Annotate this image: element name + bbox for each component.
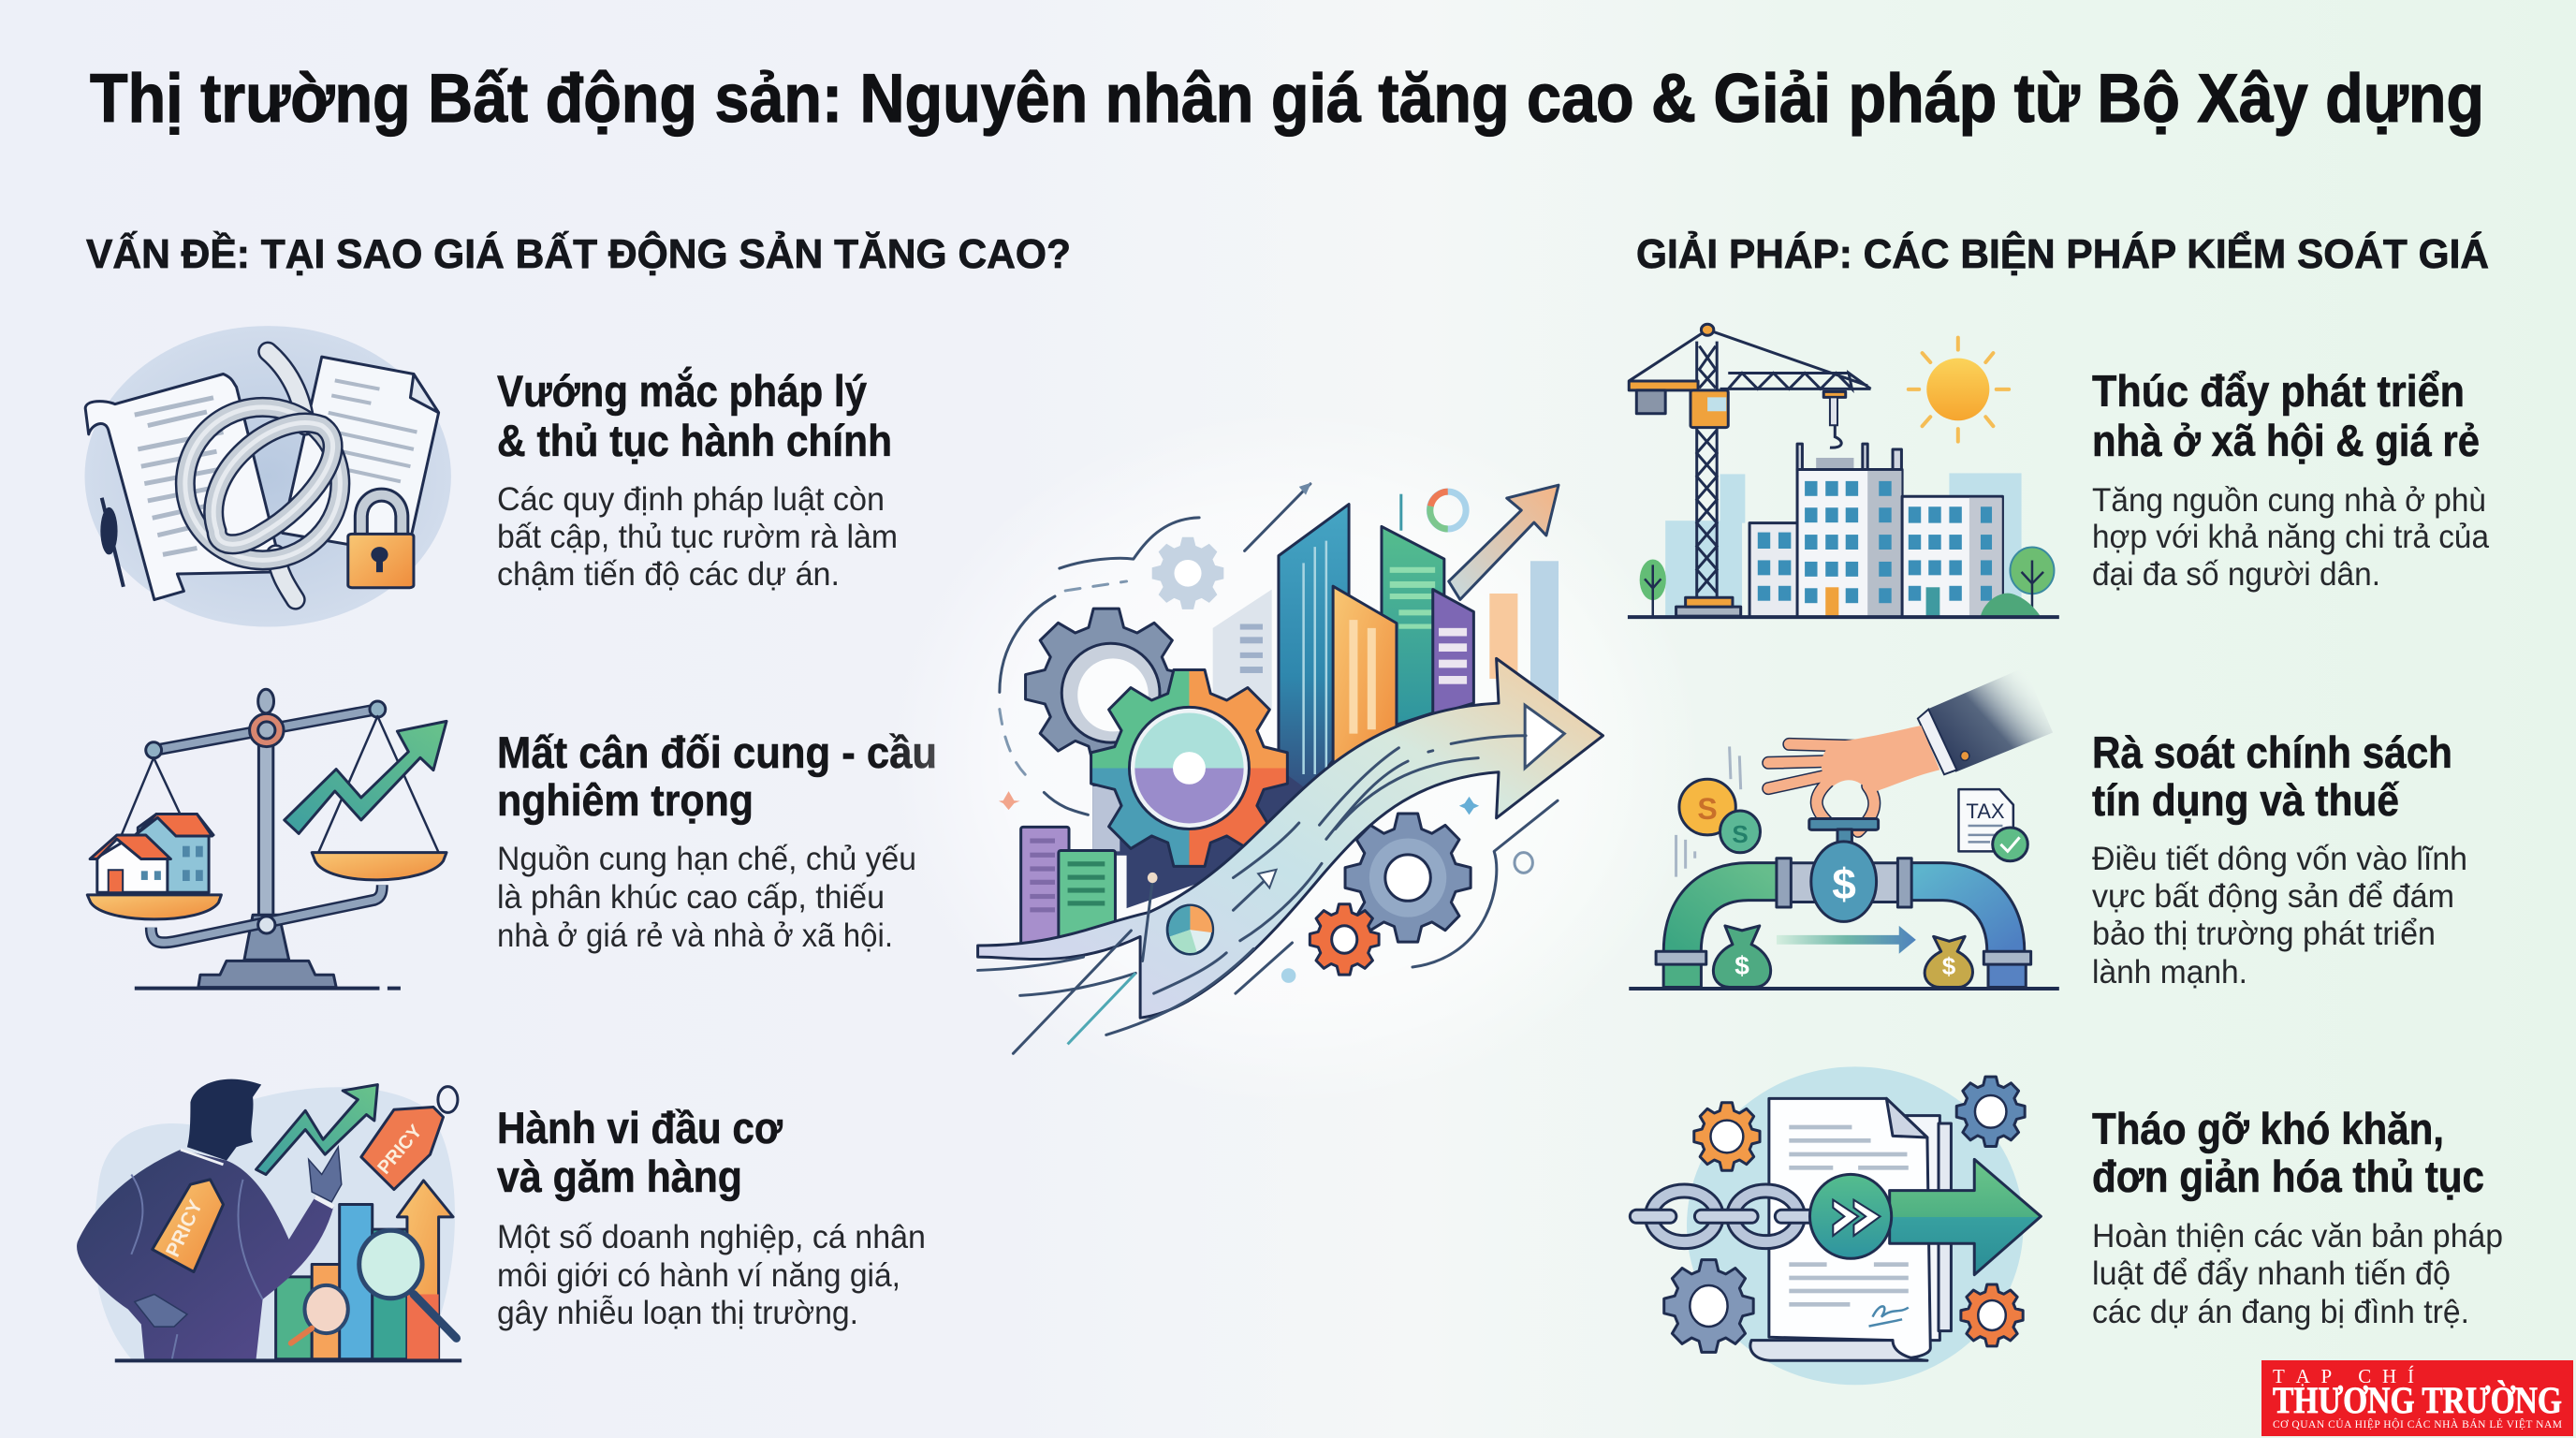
text block: speculation: gây nhiễu loạn thị trường. xyxy=(497,1295,858,1331)
icon: speculator with price tags and charts xyxy=(77,1079,461,1360)
text block: supply demand: là phân khúc cao cấp, thiếu xyxy=(497,879,885,916)
text block: legal xyxy=(497,366,898,593)
label: green coin: S xyxy=(1732,820,1749,848)
text block: legal: chậm tiến độ các dự án. xyxy=(497,556,840,593)
heading: problem column: VẤN ĐỀ: TẠI SAO GIÁ BẤT ĐỘNG SẢN TĂNG CAO? xyxy=(86,229,1071,277)
text block: legal: & thủ tục hành chính xyxy=(497,416,892,465)
label: gold coin: S xyxy=(1697,792,1718,826)
text block: supply demand: Nguồn cung hạn chế, chủ yếu xyxy=(497,841,916,877)
label: tax form: TAX xyxy=(1966,800,2005,823)
text block: remove obstacles: luật để đẩy nhanh tiến độ xyxy=(2092,1255,2451,1292)
text block: social housing: nhà ở xã hội & giá rẻ xyxy=(2092,416,2480,465)
text block: remove obstacles: Hoàn thiện các văn bản pháp xyxy=(2092,1218,2503,1255)
text block: supply demand: nhà ở giá rẻ và nhà ở xã hội. xyxy=(497,917,893,954)
text block: supply demand: Mất cân đối cung - cầu xyxy=(497,727,937,777)
icon: breaking chains on document with forward arrow xyxy=(1636,1066,2041,1385)
text block: speculation: môi giới có hành ví năng giá, xyxy=(497,1257,900,1294)
logo: Tạp chí Thương Trường: CƠ QUAN CỦA HIỆP HỘI CÁC NHÀ BÁN LẺ VIỆT NAM xyxy=(2273,1417,2562,1431)
text block: social housing: Thúc đẩy phát triển xyxy=(2092,366,2465,416)
text block: speculation xyxy=(497,1103,926,1331)
icon: tangled legal documents with padlock xyxy=(84,326,451,627)
text block: credit and tax: tín dụng và thuế xyxy=(2092,775,2400,825)
label: gold bag: $ xyxy=(1942,952,1956,980)
text block: social housing xyxy=(2092,366,2490,593)
text block: supply demand: nghiêm trọng xyxy=(497,775,754,825)
logo: Tạp chí Thương Trường xyxy=(2261,1360,2573,1436)
text block: remove obstacles: đơn giản hóa thủ tục xyxy=(2092,1152,2484,1201)
text block: speculation: Một số doanh nghiệp, cá nhân xyxy=(497,1219,926,1255)
text block: social housing: hợp với khả năng chi trả của xyxy=(2092,519,2490,555)
text block: credit and tax: bảo thị trường phát triển xyxy=(2092,916,2436,952)
heading: solution column: GIẢI PHÁP: CÁC BIỆN PHÁP KIỂM SOÁT GIÁ xyxy=(1636,229,2489,277)
text block: credit and tax: Điều tiết dông vốn vào lĩnh xyxy=(2092,841,2467,877)
text block: credit and tax: lành mạnh. xyxy=(2092,954,2247,990)
logo: Tạp chí Thương Trường: TẠP CHÍ xyxy=(2273,1365,2414,1387)
central illustration: gears, buildings and rising road arrow xyxy=(895,482,1604,1055)
text block: speculation: Hành vi đầu cơ xyxy=(497,1103,783,1152)
text block: social housing: Tăng nguồn cung nhà ở phù xyxy=(2092,482,2486,519)
text block: legal: bất cập, thủ tục rườm rà làm xyxy=(497,519,898,555)
text block: supply demand xyxy=(497,727,937,954)
label: valve dollar: $ xyxy=(1832,859,1856,908)
text block: legal: Các quy định pháp luật còn xyxy=(497,481,885,518)
text block: credit and tax: vực bất động sản để đám xyxy=(2092,878,2454,915)
text block: credit and tax: Rà soát chính sách xyxy=(2092,727,2452,777)
text block: remove obstacles: các dự án đang bị đình trệ. xyxy=(2092,1294,2469,1330)
text block: legal: Vướng mắc pháp lý xyxy=(497,366,867,416)
label: green bag: $ xyxy=(1734,951,1749,980)
label: floating tag: PRICY xyxy=(373,1121,427,1179)
text block: credit and tax xyxy=(2092,727,2467,990)
icon: crane and affordable apartment buildings xyxy=(1628,324,2059,617)
text block: speculation: và găm hàng xyxy=(497,1152,742,1201)
text block: remove obstacles: Tháo gỡ khó khăn, xyxy=(2092,1104,2444,1153)
icon: unbalanced scale with houses and rising arrow xyxy=(87,689,446,989)
text block: social housing: đại đa số người dân. xyxy=(2092,556,2380,593)
text block: remove obstacles xyxy=(2092,1104,2503,1330)
icon: hand turning valve on money pipeline with tax form xyxy=(1629,668,2059,989)
label: tag on back: PRICY xyxy=(162,1196,207,1260)
